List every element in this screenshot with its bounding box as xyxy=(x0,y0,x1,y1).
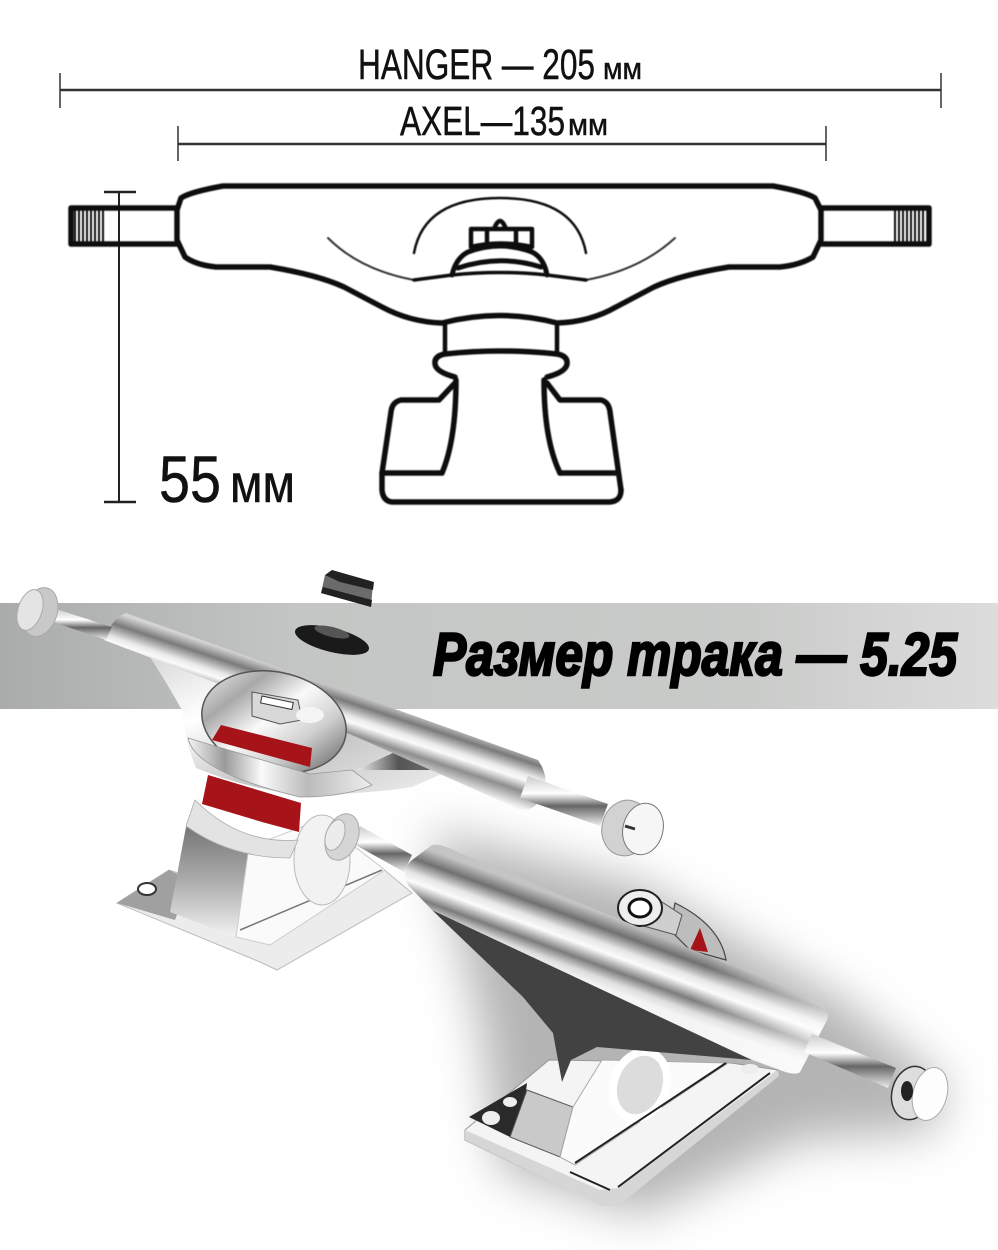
loose kingpin nut xyxy=(321,570,374,607)
base right riser xyxy=(544,380,621,490)
left axle nut xyxy=(12,583,64,641)
pivot cup xyxy=(192,658,356,786)
riser grey face xyxy=(510,1090,573,1157)
right wing curve xyxy=(586,238,675,280)
lower bushing collar xyxy=(186,800,298,858)
right axle nut xyxy=(886,1062,953,1124)
upper bushing xyxy=(212,725,312,767)
bushing dome xyxy=(452,246,547,275)
lower red bushing xyxy=(690,928,708,952)
left axle xyxy=(352,826,412,872)
base left riser xyxy=(382,380,456,473)
dimension: hanger width: мм xyxy=(603,51,642,86)
upper truck xyxy=(12,583,669,970)
left axle nut xyxy=(319,809,365,865)
right axle nut xyxy=(596,795,669,861)
kingpin head xyxy=(252,692,324,724)
hanger arm ellipse xyxy=(294,815,350,905)
dimension: truck height: мм xyxy=(230,454,295,514)
dimension: truck height: 55 xyxy=(159,442,221,516)
grey title band xyxy=(0,603,998,709)
back nut xyxy=(618,890,682,935)
dimension: axel width: AXEL—135 xyxy=(400,98,565,144)
riser white body xyxy=(560,1060,728,1165)
dimension: hanger width xyxy=(60,41,941,108)
riser edge line xyxy=(240,870,382,930)
seat line xyxy=(414,272,586,280)
plate front edge xyxy=(465,1070,779,1206)
hanger end highlight xyxy=(690,953,828,1074)
riser lines xyxy=(570,1063,770,1190)
right axle xyxy=(520,776,608,826)
upper left plate flange xyxy=(117,870,190,920)
loose washer xyxy=(292,619,372,661)
base plate xyxy=(382,473,621,502)
soft shadow behind lower truck xyxy=(430,830,945,1215)
upper riser face xyxy=(170,827,249,937)
right axle xyxy=(821,208,929,244)
mounting holes xyxy=(482,1064,759,1125)
hanger cylinder xyxy=(104,613,546,810)
dark flange xyxy=(469,1083,527,1137)
kingpin nut xyxy=(471,221,532,247)
silver ring xyxy=(188,738,372,797)
lower back bushing xyxy=(670,903,726,960)
left wing curve xyxy=(328,238,414,280)
upper riser body xyxy=(236,820,385,945)
lower truck xyxy=(319,809,953,1206)
dimension: truck height xyxy=(104,192,295,516)
hanger outline xyxy=(177,186,821,323)
mounting hole xyxy=(138,883,156,895)
dimension: axel width: мм xyxy=(568,107,608,142)
truck outline diagram xyxy=(71,186,929,502)
pivot arc xyxy=(414,198,586,253)
arch cutout xyxy=(604,1044,676,1126)
right axle xyxy=(804,1034,896,1088)
hanger cylinder xyxy=(405,845,828,1074)
lower bushing xyxy=(202,775,301,832)
neck xyxy=(445,323,557,353)
pivot body xyxy=(150,657,451,795)
dark gusset xyxy=(356,752,451,770)
dimension: hanger width: HANGER — 205 xyxy=(358,41,595,89)
left axle xyxy=(50,609,112,640)
upper base plate xyxy=(117,868,412,970)
collar xyxy=(435,351,567,377)
right thread hatch xyxy=(895,208,923,244)
black gusset xyxy=(432,910,752,1082)
left thread hatch xyxy=(75,208,103,244)
dimension: axel width xyxy=(178,98,826,161)
left axle xyxy=(71,208,177,244)
lower base plate xyxy=(465,1060,778,1205)
